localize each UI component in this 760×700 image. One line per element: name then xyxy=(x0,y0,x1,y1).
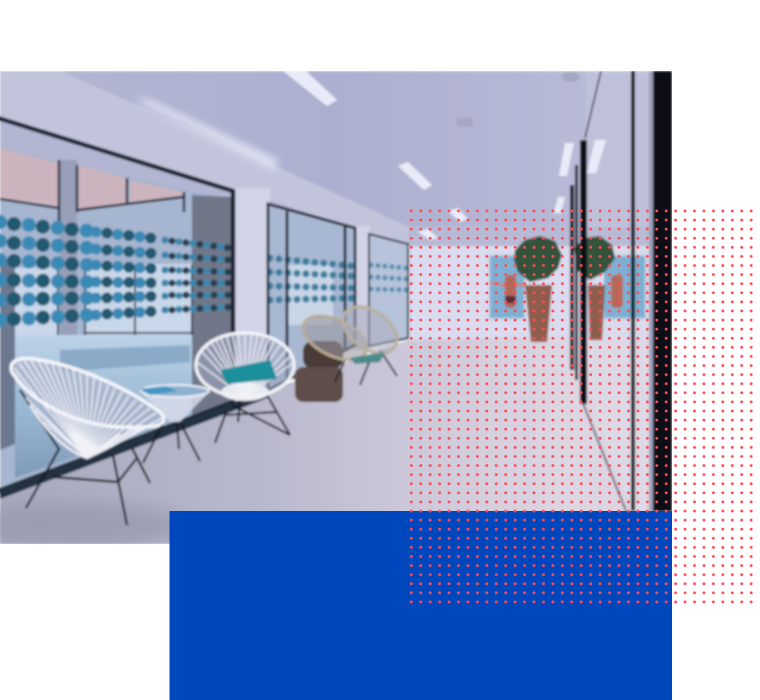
third window xyxy=(369,234,408,346)
legs xyxy=(215,395,290,443)
reflected floor xyxy=(15,335,192,478)
window frame: left xyxy=(0,118,233,491)
concrete column xyxy=(60,160,77,335)
post highlight xyxy=(649,71,653,511)
black mirror posts xyxy=(570,71,672,512)
ceiling light glow xyxy=(135,100,278,170)
glass xyxy=(369,234,408,346)
plant xyxy=(514,236,562,342)
diagonal mirror edge xyxy=(583,71,626,511)
floor xyxy=(0,336,672,544)
photo: office corridor xyxy=(0,71,672,547)
table legs xyxy=(143,422,200,463)
mirror painting xyxy=(604,254,648,320)
far soffit band xyxy=(407,229,572,247)
mirror soffit xyxy=(572,226,652,246)
lower basket xyxy=(295,367,343,402)
end wall painting xyxy=(488,254,527,320)
floor shadow xyxy=(0,502,170,544)
mirror ceiling xyxy=(586,71,652,240)
ceiling xyxy=(2,71,588,228)
shields band xyxy=(270,258,352,300)
mirror lights xyxy=(554,140,606,213)
reflected column xyxy=(0,262,15,450)
far dark shields xyxy=(172,241,230,310)
mid light shields xyxy=(96,232,160,315)
table rim xyxy=(141,385,209,397)
blue block xyxy=(170,511,672,700)
cushion xyxy=(220,360,277,384)
far wall xyxy=(408,236,573,340)
far chairs xyxy=(297,297,405,385)
upper basket xyxy=(303,341,343,369)
small table xyxy=(140,385,209,463)
far light shields xyxy=(165,240,230,310)
seat fill xyxy=(195,332,295,398)
left window xyxy=(0,120,232,490)
ceiling lights xyxy=(283,71,468,240)
mirror floor xyxy=(572,340,652,511)
pillar wall xyxy=(234,188,270,400)
rear chair legs xyxy=(335,350,397,385)
mirror wall xyxy=(572,246,652,340)
front rim xyxy=(11,358,164,427)
rear chair two xyxy=(335,297,405,363)
shorts xyxy=(505,296,516,303)
floor reflection patch xyxy=(60,345,190,372)
strings xyxy=(14,360,162,458)
figure arms xyxy=(490,283,527,290)
mirror foliage xyxy=(574,236,615,280)
second pillar wall xyxy=(354,226,370,350)
foliage xyxy=(514,236,562,282)
wall soffit above windows xyxy=(0,71,420,250)
concrete right wall xyxy=(192,195,232,418)
canvas xyxy=(490,256,524,318)
mirror pot xyxy=(588,285,605,342)
lower bowl xyxy=(30,405,140,458)
glass xyxy=(268,204,355,390)
mirror canvas xyxy=(604,256,645,318)
glass base xyxy=(0,178,195,488)
red dot grid xyxy=(407,206,756,606)
rear chair one xyxy=(297,307,373,369)
chair two xyxy=(195,332,295,443)
ceiling fittings xyxy=(457,72,580,127)
frame xyxy=(369,234,408,346)
book on table xyxy=(140,386,178,395)
bright door panel xyxy=(288,265,333,325)
mid dark shields xyxy=(107,233,160,314)
rim xyxy=(196,333,294,397)
seat fill xyxy=(12,358,165,458)
cushion xyxy=(350,352,385,364)
pot xyxy=(525,285,552,342)
shields band xyxy=(371,265,406,290)
figure body xyxy=(505,275,516,308)
dark shields xyxy=(14,224,90,319)
table basket xyxy=(141,392,209,422)
upper glass strip xyxy=(0,122,232,200)
door frames xyxy=(58,265,192,335)
chair one xyxy=(11,358,165,525)
light shields xyxy=(0,222,90,320)
mirror figure xyxy=(611,275,623,308)
upper pink windows xyxy=(0,148,183,210)
mullions xyxy=(0,160,184,222)
wicker stool xyxy=(295,341,343,402)
legs xyxy=(20,390,150,525)
frame xyxy=(488,254,526,320)
window base strip xyxy=(0,392,268,499)
strings xyxy=(197,332,294,398)
mirror panels xyxy=(572,71,652,511)
bowl xyxy=(221,383,269,401)
frame xyxy=(268,204,355,390)
reflected doors xyxy=(15,264,192,335)
second window xyxy=(268,204,355,390)
